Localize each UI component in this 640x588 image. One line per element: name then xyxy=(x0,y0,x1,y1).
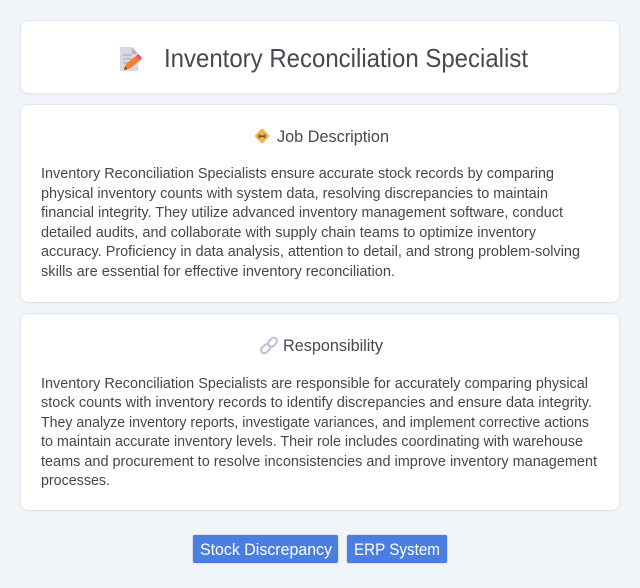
text: responsibility paragraph: to maintain accurate inventory levels. Their role includes coordinating with warehouse xyxy=(41,433,583,450)
icon: chain link xyxy=(260,336,278,355)
text: responsibility paragraph: processes. xyxy=(41,472,110,489)
text: job description paragraph: accuracy. Proficiency in data analysis, attention to detail, and strong problem-solving xyxy=(41,243,580,260)
text: responsibility paragraph: stock counts with inventory records to identify discrepancies and ensure data integrity. xyxy=(41,394,592,411)
text: job description paragraph: physical inventory counts with system data, resolving discrepancies to maintain xyxy=(41,185,548,202)
panel: job description card xyxy=(20,104,620,303)
icon: document with pencil xyxy=(120,47,142,71)
label: Stock Discrepancy: Stock Discrepancy xyxy=(200,540,332,559)
button: ERP System xyxy=(346,534,448,564)
text: job description paragraph: financial integrity. They utilize advanced inventory management software, conduct xyxy=(41,204,564,221)
text: responsibility paragraph xyxy=(41,375,598,489)
text: responsibility paragraph: teams and procurement to resolve inconsistencies and improve inventory management xyxy=(41,453,598,470)
label: ERP System: ERP System xyxy=(354,540,440,559)
text: job description paragraph: Inventory Reconciliation Specialists ensure accurate stock records by comparing xyxy=(41,165,554,182)
text: responsibility paragraph: Inventory Reconciliation Specialists are responsible for accurately comparing physical xyxy=(41,375,588,392)
title: Inventory Reconciliation Specialist xyxy=(164,43,529,73)
panel: responsibility card xyxy=(20,313,620,511)
text: responsibility paragraph: They analyze inventory reports, investigate variances, and implement corrective actions xyxy=(41,414,589,431)
heading: responsibility: Responsibility xyxy=(283,336,383,355)
text: job description paragraph: detailed audits, and collaborate with supply chain teams to optimize inventory xyxy=(41,224,536,241)
text: job description paragraph: skills are essential for effective inventory reconciliation. xyxy=(41,263,395,280)
panel: title card xyxy=(20,20,620,94)
button: Stock Discrepancy xyxy=(192,534,339,564)
heading: job description: Job Description xyxy=(277,127,389,146)
icon: job description diamond xyxy=(254,128,270,144)
text: job description paragraph xyxy=(41,165,580,280)
